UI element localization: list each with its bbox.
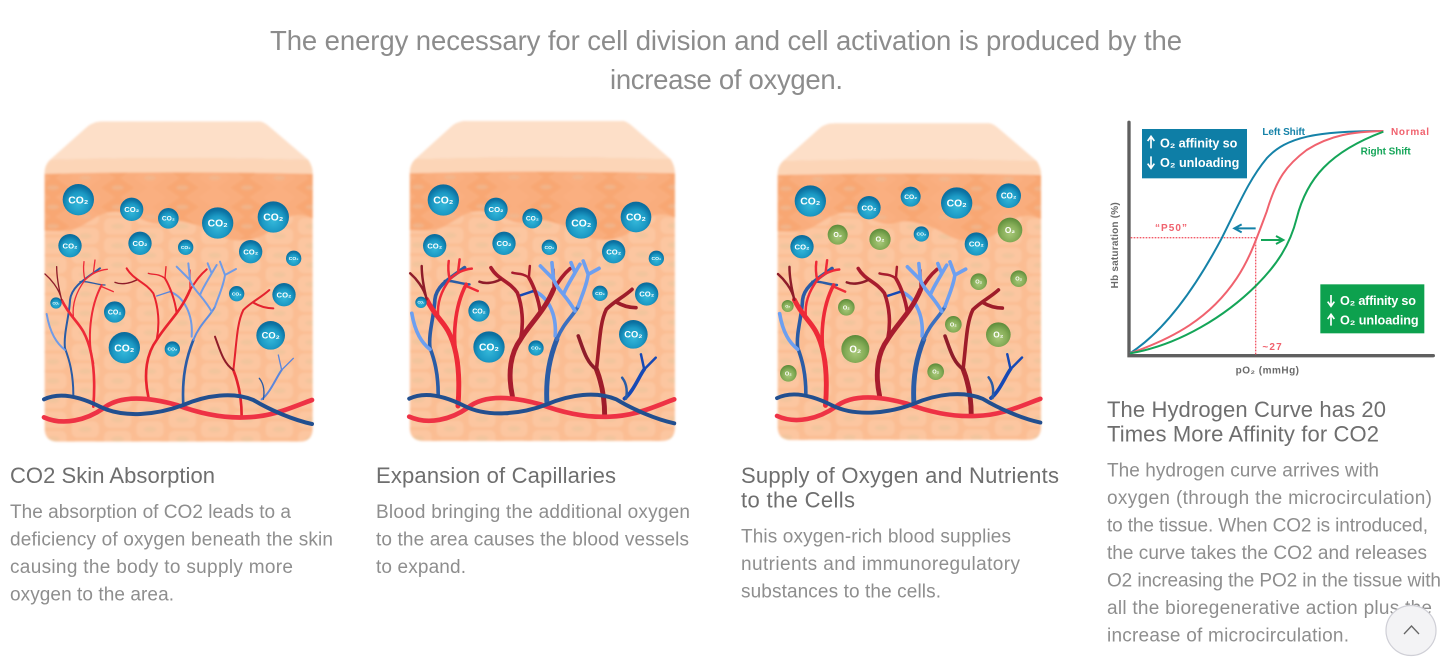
- CO2 bubbles: CO₂: [497, 239, 511, 248]
- text block: expansion of capillaries: [376, 463, 690, 578]
- text block: hydrogen curve: increase of microcirculation.: [1107, 626, 1349, 646]
- CO2 bubbles: CO₂: [472, 308, 486, 315]
- panel: CO2 skin absorption illustration: [44, 122, 313, 442]
- text block: CO2 skin absorption: [10, 463, 333, 606]
- title: The energy necessary for cell division and cell activation is produced by the: [270, 25, 1182, 56]
- CO2 bubbles: CO₂: [263, 213, 284, 224]
- CO2 bubbles: CO₂: [133, 239, 147, 248]
- CO2 bubbles: CO₂: [277, 290, 291, 299]
- CO2 bubbles: CO₂: [606, 247, 621, 256]
- CO2 bubbles: CO₂: [795, 242, 809, 251]
- CO2 bubbles: CO₂: [916, 232, 926, 238]
- O2 bubbles: O₂: [975, 280, 983, 286]
- CO2 bubbles: CO₂: [108, 309, 121, 316]
- text block: expansion of capillaries: to the area causes the blood vessels: [376, 530, 689, 550]
- P50 dotted guide: [1131, 238, 1256, 355]
- text block: CO2 skin absorption: oxygen to the area.: [10, 584, 174, 606]
- curve labels: Right Shift: [1361, 146, 1411, 157]
- curve labels: ~27: [1262, 342, 1282, 353]
- CO2 bubbles: CO₂: [433, 196, 454, 207]
- callout: right shift: O₂ affinity so: [1340, 294, 1416, 308]
- O2 bubbles: O₂: [993, 330, 1004, 340]
- O2 bubbles: O₂: [833, 232, 842, 239]
- curve labels: [1155, 127, 1429, 353]
- O2 bubbles: O₂: [950, 322, 957, 328]
- text block: hydrogen curve: O2 increasing the PO2 in the tissue with: [1107, 570, 1441, 592]
- text block: supply of oxygen and nutrients: nutrients and immunoregulatory: [741, 554, 1020, 575]
- CO2 bubbles: CO₂: [969, 240, 984, 249]
- text block: hydrogen curve: The Hydrogen Curve has 20: [1107, 397, 1386, 422]
- callout: left shift: [1142, 129, 1247, 178]
- CO2 bubbles: CO₂: [208, 219, 228, 230]
- CO2 bubbles: CO₂: [417, 301, 425, 305]
- CO2 bubbles: CO₂: [571, 219, 592, 230]
- O2 bubbles: O₂: [785, 303, 790, 308]
- CO2 bubbles: CO₂: [162, 216, 175, 223]
- CO2 bubbles: CO₂: [114, 343, 135, 354]
- title: [270, 25, 1182, 95]
- text block: hydrogen curve: all the bioregenerative action plus the: [1107, 598, 1432, 619]
- CO2 bubbles: CO₂: [243, 247, 258, 256]
- CO2 bubbles: CO₂: [862, 203, 876, 212]
- O2 bubbles: O₂: [932, 370, 940, 376]
- O2 bubbles: [780, 218, 1027, 382]
- text block: CO2 skin absorption: deficiency of oxygen beneath the skin: [10, 530, 333, 550]
- O2 bubbles: O₂: [785, 371, 792, 377]
- y axis label: Hb saturation (%): [1110, 202, 1121, 288]
- text block: hydrogen curve: The hydrogen curve arrives with: [1107, 460, 1379, 482]
- chart axes: [1129, 122, 1433, 356]
- text block: hydrogen curve: oxygen (through the microcirculation): [1107, 488, 1432, 509]
- CO2 bubbles: CO₂: [947, 199, 967, 210]
- left shift curve: [1130, 131, 1383, 353]
- CO2 bubbles: CO₂: [68, 195, 89, 206]
- CO2 bubbles: CO₂: [124, 205, 139, 214]
- CO2 bubbles: [790, 183, 1021, 258]
- title: increase of oxygen.: [610, 64, 843, 95]
- callout: right shift: [1320, 284, 1424, 333]
- chart: oxygen-hemoglobin dissociation curve: [1110, 122, 1433, 377]
- panel: expansion of capillaries illustration: [409, 121, 675, 441]
- callout: left shift: O₂ affinity so: [1160, 137, 1238, 151]
- normal curve: [1130, 131, 1383, 353]
- text block: hydrogen curve: [1107, 397, 1441, 646]
- arrow: left: [1234, 224, 1256, 232]
- text block: supply of oxygen and nutrients: This oxygen-rich blood supplies: [741, 526, 1011, 548]
- text block: CO2 skin absorption: CO2 Skin Absorption: [10, 463, 215, 488]
- panel: oxygen and nutrient supply illustration: [777, 123, 1041, 440]
- text block: CO2 skin absorption: The absorption of CO2 leads to a: [10, 502, 291, 523]
- text block: expansion of capillaries: Blood bringing the additional oxygen: [376, 502, 690, 523]
- CO2 bubbles: CO₂: [526, 216, 539, 223]
- blood vessels: [44, 260, 312, 424]
- curve labels: Normal: [1391, 127, 1429, 138]
- O2 bubbles: O₂: [1005, 225, 1015, 235]
- O2 bubbles: O₂: [849, 344, 861, 355]
- CO2 bubbles: CO₂: [544, 245, 554, 251]
- CO2 bubbles: CO₂: [624, 330, 642, 340]
- CO2 bubbles: CO₂: [651, 256, 661, 262]
- callout: left shift: O₂ unloading: [1160, 156, 1239, 170]
- CO2 bubbles: CO₂: [904, 194, 917, 201]
- CO2 bubbles: CO₂: [181, 245, 191, 251]
- CO2 bubbles: CO₂: [167, 347, 177, 353]
- text block: hydrogen curve: to the tissue. When CO2 is introduced,: [1107, 516, 1428, 536]
- curve labels: “P50”: [1155, 223, 1187, 234]
- text block: supply of oxygen and nutrients: Supply of Oxygen and Nutrients: [741, 463, 1059, 488]
- text block: supply of oxygen and nutrients: to the Cells: [741, 488, 855, 512]
- text block: expansion of capillaries: Expansion of Capillaries: [376, 463, 616, 488]
- text block: CO2 skin absorption: causing the body to supply more: [10, 557, 293, 578]
- O2 bubbles: O₂: [876, 235, 884, 244]
- callout: right shift: O₂ unloading: [1340, 313, 1419, 327]
- x axis label: pO₂ (mmHg): [1236, 366, 1299, 377]
- CO2 bubbles: CO₂: [626, 213, 646, 224]
- O2 bubbles: O₂: [1015, 277, 1023, 283]
- CO2 bubbles: CO₂: [427, 241, 442, 250]
- right shift curve: [1130, 132, 1383, 353]
- text block: supply of oxygen and nutrients: [741, 463, 1059, 602]
- CO2 bubbles: CO₂: [639, 290, 654, 299]
- CO2 bubbles: CO₂: [595, 291, 605, 297]
- O2 bubbles: O₂: [843, 305, 850, 311]
- CO2 bubbles: CO₂: [531, 346, 541, 352]
- skin block: [45, 122, 313, 442]
- CO2 bubbles: [50, 184, 301, 363]
- CO2 bubbles: CO₂: [800, 197, 821, 208]
- CO2 bubbles: CO₂: [289, 256, 299, 262]
- CO2 bubbles: CO₂: [63, 241, 77, 250]
- CO2 bubbles: CO₂: [489, 205, 503, 214]
- text block: hydrogen curve: the curve takes the CO2 and releases: [1107, 543, 1427, 564]
- scroll to top button: [1386, 606, 1436, 656]
- curve labels: Left Shift: [1262, 127, 1306, 138]
- text block: supply of oxygen and nutrients: substances to the cells.: [741, 582, 941, 602]
- arrow: right: [1261, 236, 1283, 244]
- skin block: [410, 121, 675, 441]
- text block: expansion of capillaries: to expand.: [376, 557, 466, 578]
- blood vessels: [409, 259, 674, 423]
- CO2 bubbles: CO₂: [1001, 191, 1017, 200]
- CO2 bubbles: CO₂: [52, 301, 60, 305]
- CO2 bubbles: CO₂: [262, 331, 280, 341]
- blood vessels: [777, 260, 1040, 423]
- text block: hydrogen curve: Times More Affinity for CO2: [1107, 422, 1379, 446]
- CO2 bubbles: [415, 184, 664, 363]
- skin block: [778, 123, 1041, 440]
- CO2 bubbles: CO₂: [232, 291, 242, 297]
- CO2 bubbles: CO₂: [479, 343, 499, 354]
